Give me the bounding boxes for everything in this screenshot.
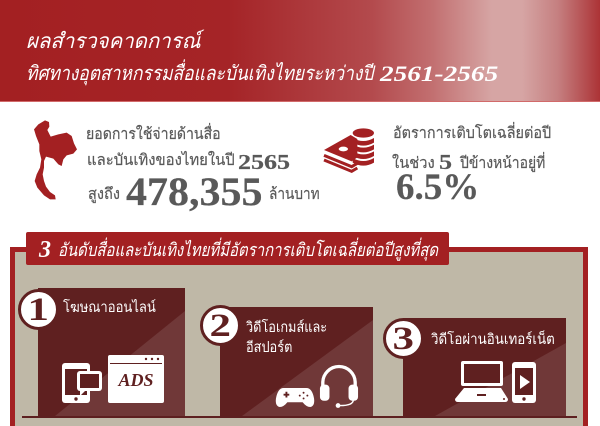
rank badge 1: 1 (28, 292, 49, 328)
icon: headset (320, 364, 358, 408)
card 2 label (246, 319, 327, 356)
icon: phone with play button (512, 362, 536, 403)
card 1: online advertising (18, 288, 185, 416)
card 1 label: โฆษณาออนไลน์ (63, 300, 156, 316)
text: spending line two: 2565 (238, 150, 290, 174)
panel: top 3 fastest growing (10, 247, 588, 426)
rank badge 3 (383, 318, 424, 359)
icon: Thailand map (34, 120, 77, 200)
card 3: internet video (383, 318, 566, 416)
icon: ads browser window (108, 355, 164, 403)
icon: phone with chat bubble (62, 363, 102, 403)
header banner (0, 0, 600, 102)
text: growth percentage: 6.5% (396, 167, 479, 208)
icon: coins and banknotes (324, 128, 374, 173)
card 3 background (403, 318, 566, 416)
card 1 background (38, 288, 185, 416)
icon: game controller (276, 388, 314, 407)
card 3 label: วิดีโอผ่านอินเทอร์เน็ต (431, 332, 555, 348)
stat: media spending (34, 120, 320, 214)
card 2 label: วิดีโอเกมส์และ (246, 320, 327, 336)
text: growth line two: ปีข้างหน้าอยู่ที่ (460, 155, 545, 172)
text: growth line two: ในช่วง (392, 155, 435, 172)
card 2 label: อีสปอร์ต (246, 340, 292, 356)
text: spending amount (88, 169, 320, 214)
text: growth line two (392, 150, 545, 174)
text: spending line two (87, 150, 290, 174)
title line one: ผลสำรวจคาดการณ์ (26, 29, 201, 53)
text: spending amount: ล้านบาท (269, 186, 320, 203)
card 2 background (220, 307, 373, 416)
heading text: 3 (39, 237, 51, 263)
card 2: video games and esports (200, 305, 373, 416)
icon: ads browser window: ADS (117, 370, 154, 390)
title line two (26, 59, 498, 86)
text: spending line one: ยอดการใช้จ่ายด้านสื่อ (86, 126, 221, 143)
stat: growth rate (324, 122, 551, 208)
text: spending amount: 478,355 (126, 169, 262, 214)
text: growth line one: อัตราการเติบโตเฉลี่ยต่อปี (393, 125, 551, 142)
rank badge 1 (18, 289, 59, 330)
rank badge 3: 3 (393, 321, 414, 357)
text: growth line two: 5 (439, 150, 452, 174)
rank badge 2 (200, 305, 241, 346)
icon: laptop (455, 361, 508, 402)
title line two: 2561-2565 (380, 61, 498, 86)
panel heading tab (26, 232, 449, 265)
rank badge 2: 2 (210, 308, 231, 344)
heading text: อันดับสื่อและบันเทิงไทยที่มีอัตราการเติบโตเฉลี่ยต่อปีสูงที่สุด (58, 240, 438, 260)
baseline shelf (22, 416, 577, 418)
text: spending amount: สูงถึง (88, 186, 120, 203)
title line two: ทิศทางอุตสาหกรรมสื่อและบันเทิงไทยระหว่างปี (26, 63, 373, 85)
text: spending line two: และบันเทิงของไทยในปี (87, 152, 235, 169)
